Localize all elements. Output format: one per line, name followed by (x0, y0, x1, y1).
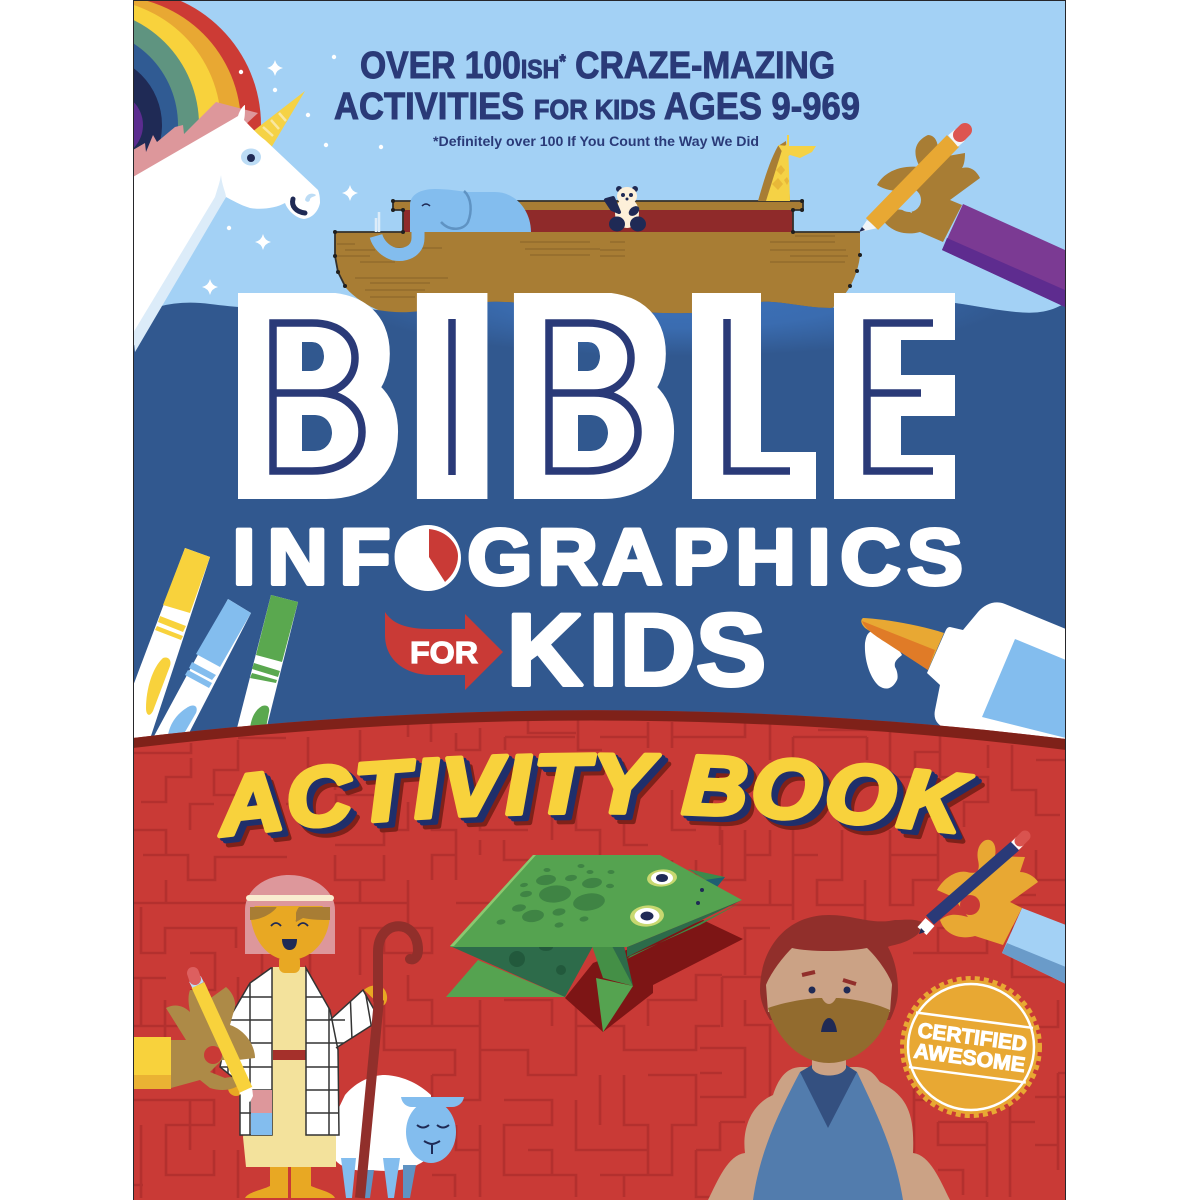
man neck (812, 1060, 846, 1076)
shepherd headband (246, 895, 334, 901)
top tagline (334, 45, 860, 149)
hand with navy pencil, top right of panel (919, 836, 1066, 984)
man hair (760, 915, 924, 1020)
red maze panel (133, 710, 1066, 1200)
frog mouth (627, 900, 742, 957)
unicorn mane (133, 102, 258, 180)
shepherd robe (243, 967, 336, 1167)
unicorn face (241, 148, 261, 166)
thumb of the shepherd behind the pencil (228, 1080, 244, 1096)
hand with pencil, top right (859, 130, 1065, 307)
frog back flap (688, 869, 725, 887)
frog spots (496, 864, 614, 928)
unicorn body (133, 105, 320, 347)
unicorn horn (252, 91, 305, 148)
yellow crayon (133, 548, 210, 745)
activity book heading: ACTIVITY BOOK (217, 752, 976, 838)
subtitle: KIDS: KIDS (507, 592, 766, 707)
ark (333, 199, 862, 322)
certified awesome seal: AWESOME (912, 1040, 1027, 1077)
shepherd coat (215, 960, 380, 1140)
frog shadow (565, 920, 743, 1032)
sheep (333, 1075, 464, 1198)
sparkles around the unicorn (202, 55, 383, 295)
man features (808, 986, 816, 994)
pencil (859, 220, 878, 232)
elephant (376, 189, 531, 254)
blue crayon (153, 599, 251, 738)
frog back leg (446, 960, 565, 997)
frog eyes (629, 868, 704, 928)
water (133, 301, 1066, 760)
hand with yellow pencil, bottom left (134, 973, 255, 1102)
glue bottle (861, 602, 1066, 745)
yellow pencil (198, 985, 246, 1090)
tan hand (166, 987, 255, 1090)
shepherd face (250, 906, 330, 960)
ark upper deck (393, 201, 803, 210)
shepherd belt (273, 1050, 306, 1060)
for arrow (385, 612, 503, 690)
activity book heading: ACTIVITY BOOK (220, 754, 979, 841)
origami frog (446, 855, 743, 1032)
man beard (768, 998, 890, 1063)
for arrow: FOR (410, 635, 478, 670)
top tagline: OVER 100ISH (360, 45, 564, 87)
BIBLE inline accent strokes (273, 319, 933, 475)
shepherd staff (378, 926, 418, 1000)
activity book heading: ACTIVITY BOOK (222, 757, 982, 844)
top tagline: * (559, 52, 566, 73)
top tagline: ACTIVITIES FOR KIDS AGES 9-969 (334, 86, 860, 128)
ark hull (335, 232, 860, 322)
shepherd hand (364, 985, 387, 1006)
shepherd neck (279, 955, 300, 973)
main title: BIBLE: BIBLE (241, 260, 979, 532)
bottle (927, 602, 1066, 745)
navy pencil (930, 846, 1015, 920)
cover background (134, 1, 1065, 1200)
bottle label (982, 639, 1066, 738)
activity book heading: ACTIVITY BOOK (226, 761, 985, 848)
purple sleeve (942, 204, 1065, 307)
certified awesome seal (903, 979, 1039, 1115)
subtitle: INFOGRAPHICS: INFOGRAPHICS (232, 513, 963, 601)
shepherd (215, 875, 464, 1198)
shepherd head cloth (245, 875, 335, 954)
green crayon (236, 595, 298, 732)
crayons (133, 548, 298, 745)
man face (766, 948, 892, 1012)
orange hand (937, 840, 1038, 945)
top tagline: CRAZE-MAZING (566, 45, 835, 87)
brown hand (877, 135, 980, 242)
bearded man (708, 915, 950, 1200)
giraffe (758, 135, 816, 201)
cover border (134, 0, 1066, 1200)
nozzle (861, 618, 944, 670)
shepherd legs and feet (245, 1160, 335, 1198)
unicorn (133, 91, 320, 352)
glue blob (865, 631, 902, 688)
blue sleeve (1002, 908, 1066, 984)
pie chart letter O (395, 525, 461, 591)
maroon arc band (133, 710, 1066, 750)
water foam under the ark (396, 302, 968, 349)
frog body (450, 855, 742, 947)
frog front foot (592, 946, 633, 986)
man shoulders (708, 1067, 950, 1200)
rainbow (134, 1, 261, 152)
footnote: *Definitely over 100 If You Count the Way We Did (433, 134, 759, 149)
man tunic (753, 1072, 903, 1200)
certified awesome seal: CERTIFIED (916, 1019, 1028, 1056)
yellow sleeve (134, 1037, 171, 1077)
maze pattern (133, 720, 1066, 1198)
panda (606, 186, 646, 232)
